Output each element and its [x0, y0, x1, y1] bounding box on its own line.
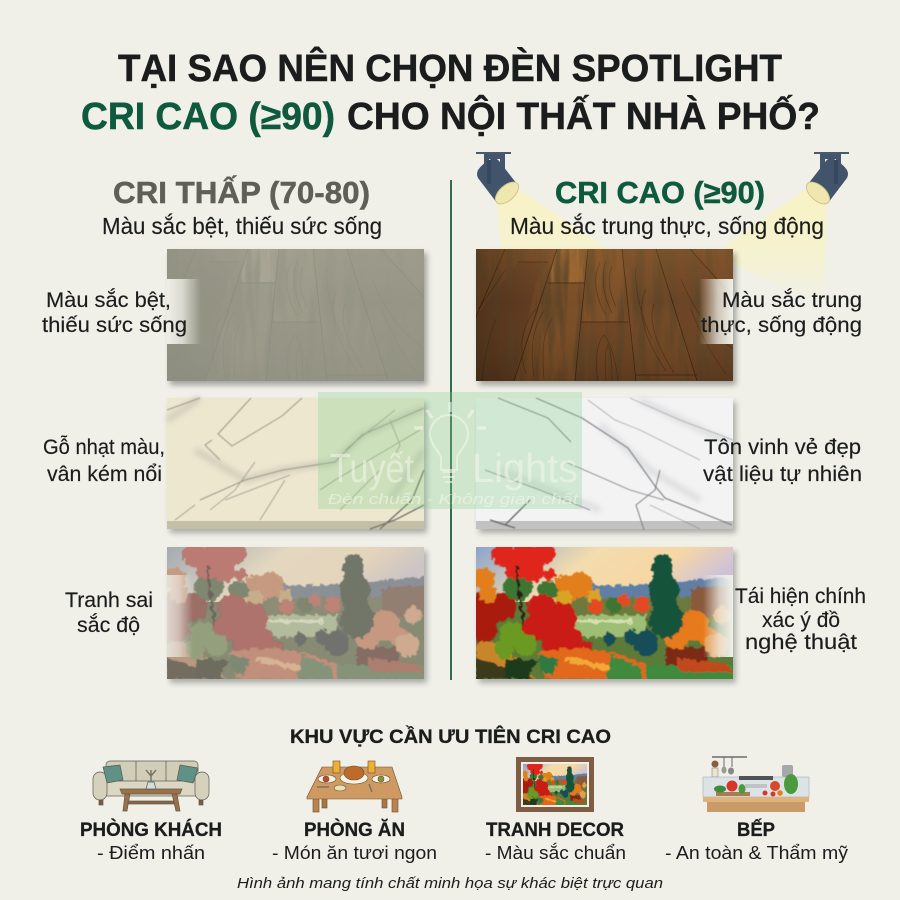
- label: high painting: xác ý đồ: [762, 609, 840, 632]
- left column header: Màu sắc bệt, thiếu sức sống: [102, 213, 382, 239]
- area: dining room: - Món ăn tươi ngon: [272, 842, 437, 863]
- area: living room: - Điểm nhấn: [97, 842, 205, 863]
- title: CRI CAO (≥90): [81, 96, 335, 138]
- area: decor painting: TRANH DECOR: [486, 819, 624, 841]
- watermark: [318, 392, 582, 509]
- area: living room: PHÒNG KHÁCH: [80, 817, 222, 841]
- right column header: Màu sắc trung thực, sống động: [510, 213, 824, 239]
- area: dining room: [272, 817, 437, 863]
- panel: high CRI marble: [476, 398, 736, 533]
- divider: [450, 180, 452, 680]
- light beams: [497, 188, 827, 305]
- icon: sofa: [93, 761, 209, 811]
- label: high marble: vật liệu tự nhiên: [703, 463, 862, 486]
- panel: low CRI painting: [159, 541, 429, 683]
- title: CHO NỘI THẤT NHÀ PHỐ?: [347, 93, 820, 138]
- label: low marble: vân kém nổi: [47, 463, 162, 486]
- label: low painting: Tranh sai: [65, 589, 153, 612]
- panel: low CRI wood: [167, 249, 427, 385]
- label: high painting: nghệ thuật: [745, 631, 857, 654]
- label: low marble: Gỗ nhạt màu,: [43, 436, 165, 459]
- area: decor painting: - Màu sắc chuẩn: [485, 842, 626, 863]
- panel: high CRI wood: [476, 249, 736, 385]
- label: low wood: thiếu sức sống: [42, 314, 187, 337]
- label: high wood: [701, 289, 862, 337]
- label: high painting: Tái hiện chính: [735, 585, 866, 608]
- area: living room: [80, 817, 222, 863]
- watermark: Tuyết: [330, 445, 414, 491]
- right column header: [510, 175, 824, 239]
- icon: watermark bulb: [414, 402, 486, 482]
- right column header: CRI CAO (≥90): [555, 175, 765, 210]
- label: low marble: [43, 436, 165, 486]
- label: high marble: Tôn vinh vẻ đẹp: [704, 436, 861, 459]
- area: kitchen: - An toàn & Thẩm mỹ: [665, 842, 849, 863]
- label: high marble: [703, 436, 862, 486]
- footnote: Hình ảnh mang tính chất minh họa sự khác biệt trực quan: [237, 875, 663, 892]
- left column header: CRI THẤP (70-80): [113, 175, 370, 210]
- left column header: [102, 175, 382, 239]
- label: high painting: [735, 585, 866, 654]
- icon: kitchen: [703, 757, 809, 812]
- area: dining room: PHÒNG ĂN: [304, 817, 405, 841]
- title: TẠI SAO NÊN CHỌN ĐÈN SPOTLIGHT: [118, 46, 782, 90]
- area: kitchen: [665, 818, 849, 863]
- panel: low CRI marble: [167, 398, 427, 533]
- watermark: Đèn chuẩn - Không gian chất: [328, 491, 579, 508]
- area: decor painting: [485, 819, 626, 863]
- title: [81, 46, 820, 138]
- section heading: KHU VỰC CẦN ƯU TIÊN CRI CAO: [290, 724, 611, 748]
- icon: dining table: [307, 761, 402, 812]
- watermark: Lights: [472, 445, 578, 491]
- icon: left spotlight: [476, 152, 522, 208]
- label: low painting: [65, 589, 153, 637]
- panel: high CRI painting: [468, 541, 738, 683]
- label: high wood: Màu sắc trung: [722, 289, 862, 312]
- icon: right spotlight: [803, 152, 849, 208]
- label: low wood: [42, 289, 187, 337]
- label: low painting: sắc độ: [77, 614, 140, 637]
- label: low wood: Màu sắc bệt,: [46, 289, 171, 312]
- area: kitchen: BẾP: [737, 818, 775, 841]
- label: high wood: thực, sống động: [701, 314, 862, 337]
- icon: framed painting: [516, 757, 594, 812]
